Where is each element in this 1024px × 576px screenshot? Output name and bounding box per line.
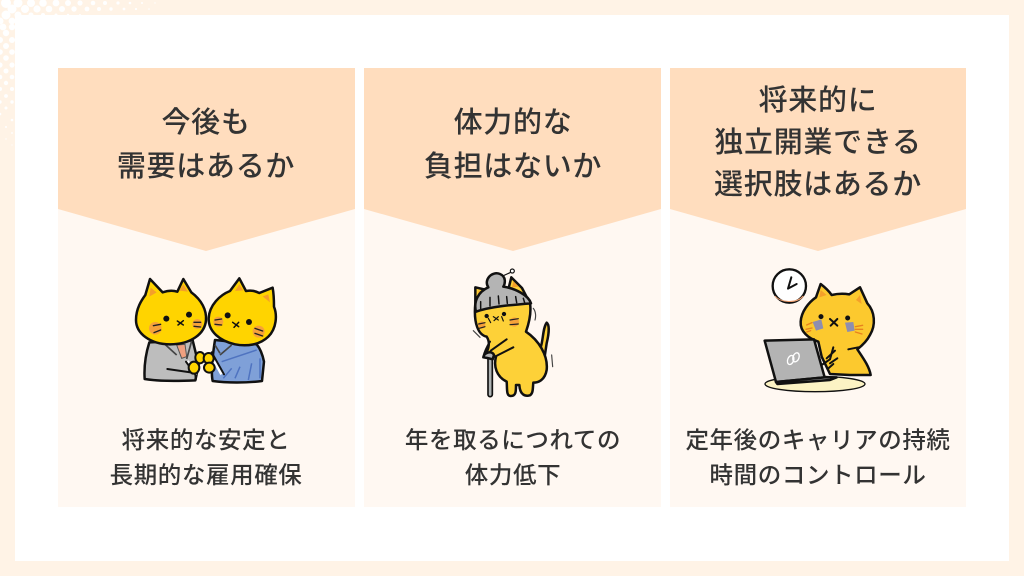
panel: 将来的に独立開業できる選択肢はあるか [670,68,966,507]
icon: elderly cat with knit hat and cane [473,269,553,397]
heading: 将来的に独立開業できる選択肢はあるか: 将来的に [759,85,877,117]
heading: 将来的に独立開業できる選択肢はあるか: 選択肢はあるか [714,168,922,201]
laptop [765,339,825,382]
caption: 将来的な安定と長期的な雇用確保: 将来的な安定と [122,427,290,453]
heading: 今後も需要はあるか: 需要はあるか [117,151,295,183]
panel: 今後も需要はあるか [58,68,355,507]
clock [773,269,806,303]
caption: 将来的な安定と長期的な雇用確保: 長期的な雇用確保 [110,462,302,488]
caption: 定年後のキャリアの持続時間のコントロール: 時間のコントロール [710,462,926,488]
panel: 体力的な負担はないか [364,68,661,507]
heading: 今後も需要はあるか: 今後も [161,107,251,139]
header banner: 将来的に独立開業できる選択肢はあるか [670,68,966,251]
heading: 体力的な負担はないか: 負担はないか [424,150,602,183]
caption: 年を取るにつれての体力低下: 体力低下 [465,462,561,488]
icon: cat working on a laptop with a clock [765,269,874,392]
heading: 体力的な負担はないか: 体力的な [454,107,572,139]
header banner: 体力的な負担はないか [364,68,661,251]
hands [195,352,205,363]
caption: 年を取るにつれての体力低下: 年を取るにつれての [405,427,621,453]
heading: 将来的に独立開業できる選択肢はあるか: 独立開業できる [714,126,922,159]
desk mat [765,376,865,392]
caption: 定年後のキャリアの持続時間のコントロール: 定年後のキャリアの持続 [685,427,951,453]
header banner: 今後も需要はあるか [58,68,355,251]
icon: two cats in suits shaking hands [136,278,276,382]
